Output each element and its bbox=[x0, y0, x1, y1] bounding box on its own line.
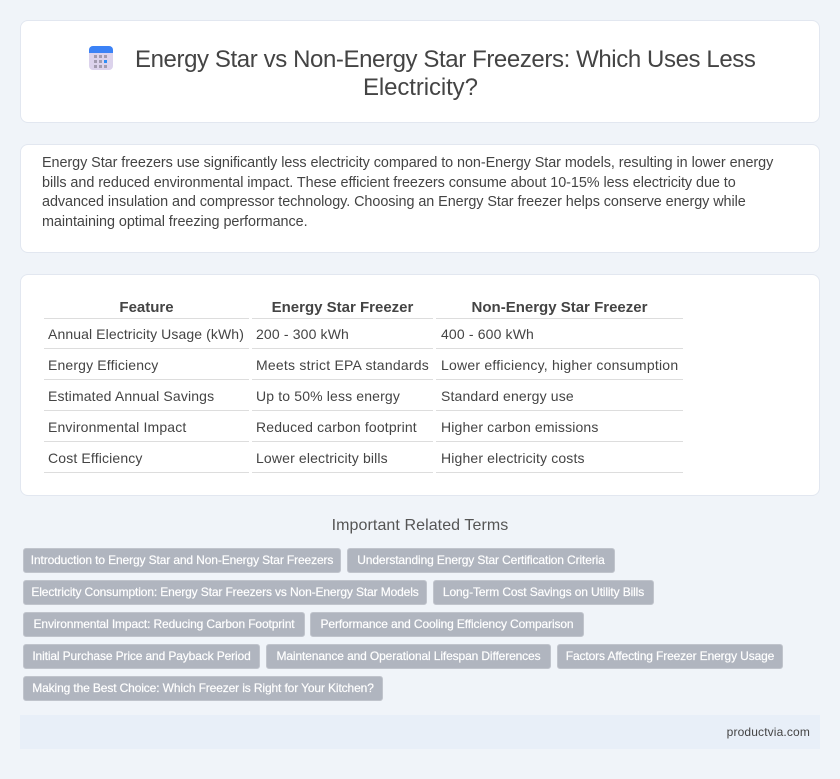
summary text: Energy Star freezers use significantly less electricity compared to non-Energy Star models, resulting in lower energy bbox=[42, 155, 773, 171]
footer bbox=[20, 715, 820, 749]
tag: Long-Term Cost Savings on Utility Bills bbox=[443, 585, 644, 599]
row: energy efficiency: Meets strict EPA standards bbox=[256, 357, 429, 373]
row: cost efficiency: Lower electricity bills bbox=[256, 450, 388, 466]
tag bbox=[266, 644, 551, 669]
row: environmental impact: Environmental Impact bbox=[48, 419, 186, 435]
tag bbox=[23, 580, 427, 605]
footer site name: productvia.com bbox=[727, 725, 810, 739]
row: estimated annual savings bbox=[48, 388, 574, 404]
row: annual electricity usage: 200 - 300 kWh bbox=[256, 326, 349, 342]
tag bbox=[557, 644, 783, 669]
panel: summary bbox=[20, 144, 820, 253]
icon: calendar grid bbox=[89, 46, 113, 70]
row: estimated annual savings: Up to 50% less energy bbox=[256, 388, 400, 404]
row: environmental impact: Reduced carbon footprint bbox=[256, 419, 417, 435]
summary text: advanced insulation and compressor technology. Choosing an Energy Star freezer helps conserve energy while bbox=[42, 194, 746, 210]
related term tags bbox=[23, 548, 783, 701]
title line 2: Electricity? bbox=[363, 74, 478, 101]
row: cost efficiency: Cost Efficiency bbox=[48, 450, 143, 466]
table header bbox=[119, 299, 648, 316]
row: estimated annual savings: Standard energy use bbox=[441, 388, 574, 404]
row: annual electricity usage: Annual Electricity Usage (kWh) bbox=[48, 326, 244, 342]
row: estimated annual savings: Estimated Annual Savings bbox=[48, 388, 214, 404]
summary text bbox=[42, 155, 774, 230]
row: cost efficiency bbox=[48, 450, 585, 466]
heading: related terms: Important Related Terms bbox=[332, 517, 508, 534]
tag: Factors Affecting Freezer Energy Usage bbox=[566, 649, 774, 663]
tag bbox=[347, 548, 615, 573]
row: energy efficiency: Lower efficiency, higher consumption bbox=[441, 357, 678, 373]
tag: Making the Best Choice: Which Freezer is Right for Your Kitchen? bbox=[32, 681, 374, 695]
title line 1: Energy Star vs Non-Energy Star Freezers: Which Uses Less bbox=[135, 46, 756, 73]
panel: title bbox=[20, 20, 820, 123]
tag: Initial Purchase Price and Payback Period bbox=[32, 649, 251, 663]
tag bbox=[433, 580, 654, 605]
row: annual electricity usage bbox=[48, 326, 534, 342]
tag bbox=[23, 644, 260, 669]
summary text: maintaining optimal freezing performance. bbox=[42, 214, 308, 230]
tag: Understanding Energy Star Certification Criteria bbox=[357, 553, 605, 567]
table header: Non-Energy Star Freezer bbox=[472, 299, 647, 316]
tag bbox=[310, 612, 584, 637]
row: energy efficiency: Energy Efficiency bbox=[48, 357, 158, 373]
tag bbox=[23, 612, 305, 637]
row: environmental impact: Higher carbon emissions bbox=[441, 419, 599, 435]
tag: Introduction to Energy Star and Non-Energy Star Freezers bbox=[31, 553, 333, 567]
table header: Feature bbox=[119, 299, 174, 316]
table header: Energy Star Freezer bbox=[272, 299, 413, 316]
row: cost efficiency: Higher electricity costs bbox=[441, 450, 585, 466]
row: environmental impact bbox=[48, 419, 599, 435]
tag: Electricity Consumption: Energy Star Freezers vs Non-Energy Star Models bbox=[31, 585, 419, 599]
tag bbox=[23, 676, 383, 701]
tag bbox=[23, 548, 341, 573]
panel: comparison table bbox=[20, 274, 820, 496]
row: annual electricity usage: 400 - 600 kWh bbox=[441, 326, 534, 342]
row: energy efficiency bbox=[48, 357, 678, 373]
tag: Environmental Impact: Reducing Carbon Footprint bbox=[34, 617, 294, 631]
tag: Maintenance and Operational Lifespan Differences bbox=[277, 649, 540, 663]
tag: Performance and Cooling Efficiency Comparison bbox=[321, 617, 573, 631]
summary text: bills and reduced environmental impact. These efficient freezers consume about 10-15% less electricity due to bbox=[42, 174, 736, 190]
